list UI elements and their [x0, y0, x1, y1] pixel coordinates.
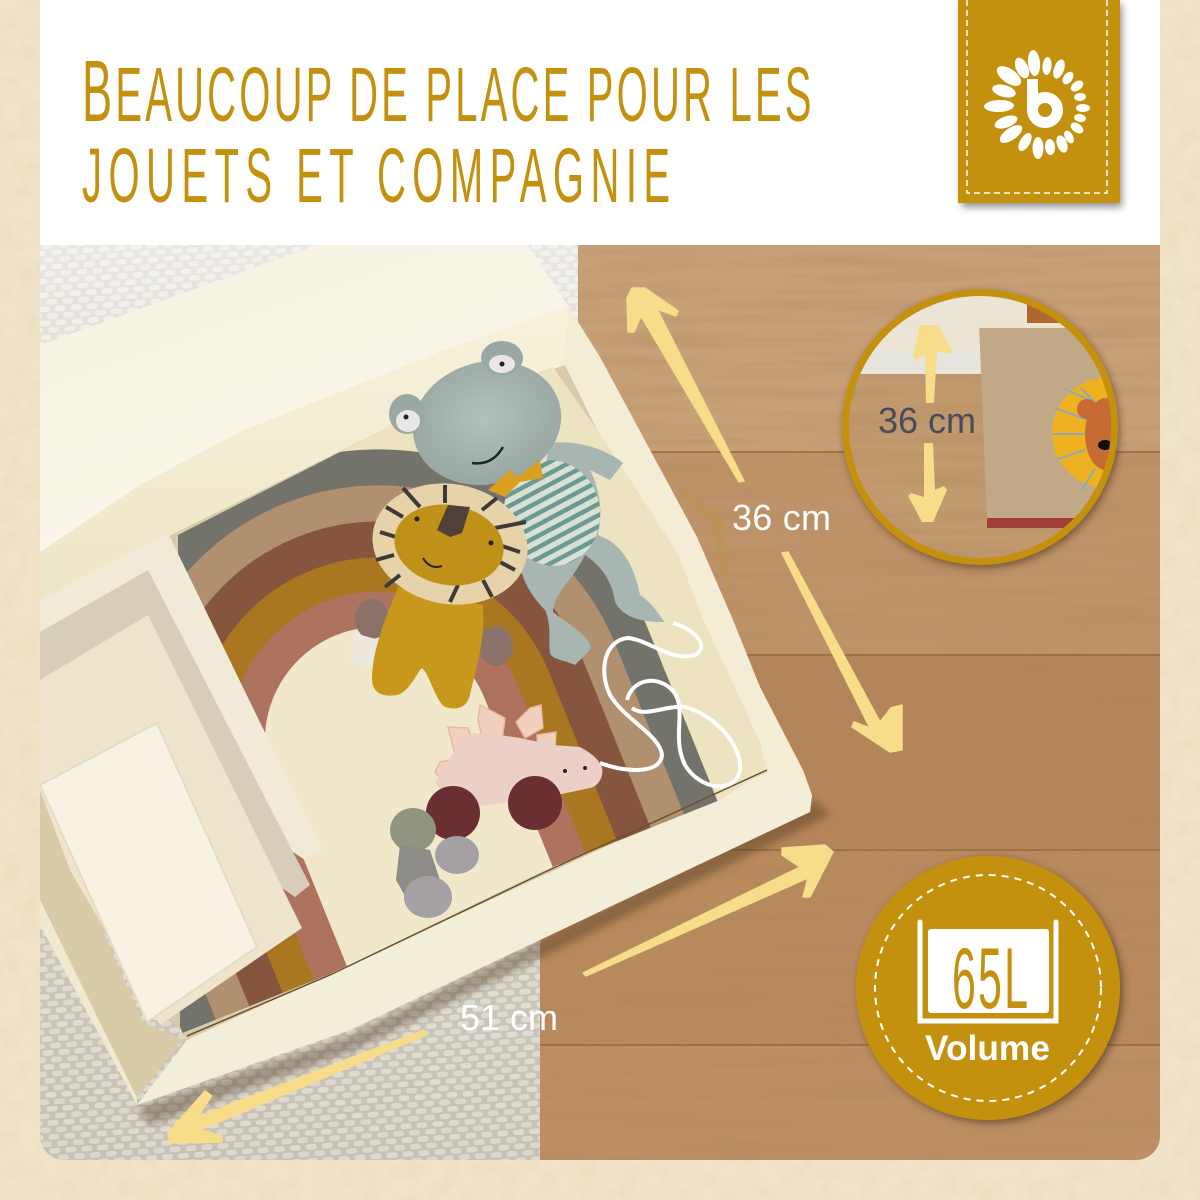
inset height detail	[840, 285, 1162, 568]
small green dino toy	[390, 808, 479, 918]
header panel	[40, 0, 1160, 246]
white cord	[600, 623, 740, 786]
lion eyes and mouth	[414, 516, 494, 567]
dino body	[435, 733, 603, 806]
title	[82, 42, 815, 220]
blanket shadow line	[187, 770, 767, 1036]
left rim	[40, 900, 137, 1105]
measure arrow: width left	[168, 1030, 426, 1143]
wood floor	[500, 245, 1160, 1160]
volume label: Volume	[925, 1029, 1050, 1068]
frog belly	[504, 460, 600, 566]
frog smile	[472, 447, 503, 463]
box interior	[40, 365, 767, 1040]
mane stripes	[376, 485, 526, 602]
storage box	[40, 245, 830, 1125]
frog head	[413, 362, 562, 485]
dino plates	[435, 705, 556, 782]
lion face	[394, 504, 504, 586]
lion body	[372, 587, 483, 708]
frog eyes	[389, 341, 523, 434]
lid front band	[40, 306, 568, 603]
dino eyes	[563, 766, 587, 773]
measure arrow: depth up	[627, 288, 744, 482]
dino wheels	[426, 776, 562, 840]
rug	[40, 245, 578, 1160]
box shadow	[137, 800, 830, 1125]
icon: container	[920, 922, 1056, 1021]
measure arrow: depth down	[782, 552, 902, 752]
blanket with rainbow	[178, 367, 767, 1034]
lid	[40, 245, 568, 552]
right wall	[565, 306, 812, 812]
inset arrow up	[913, 325, 952, 403]
title: JOUETS ET COMPAGNIE	[82, 133, 670, 220]
frog toy	[389, 341, 665, 665]
lion toy	[348, 471, 537, 708]
inset label: 36 cm	[878, 400, 976, 441]
lion tag	[348, 633, 379, 667]
inset scene	[840, 285, 1162, 564]
photo panel	[23, 245, 1160, 1160]
towels	[40, 533, 322, 1025]
frog limbs	[522, 442, 665, 665]
volume value: 65L	[952, 931, 1028, 1027]
inset arrow down	[908, 443, 947, 522]
icon: sunflower logo	[984, 50, 1090, 159]
label: 51 cm: 51 cm	[460, 997, 558, 1038]
title: BEAUCOUP DE PLACE POUR LES	[82, 42, 815, 140]
measure arrow: width right	[583, 845, 833, 976]
label: 36 cm: 36 cm	[732, 497, 831, 538]
bottom wall	[137, 772, 812, 1105]
lion mane	[372, 483, 528, 605]
wall tag flap	[663, 470, 734, 615]
lion arms	[355, 599, 513, 666]
lion nose	[437, 505, 470, 537]
dinosaur toy	[426, 705, 603, 840]
left wall	[40, 850, 183, 1098]
volume badge	[856, 856, 1123, 1123]
frog bowtie	[488, 460, 543, 497]
brand tag	[958, 0, 1122, 207]
